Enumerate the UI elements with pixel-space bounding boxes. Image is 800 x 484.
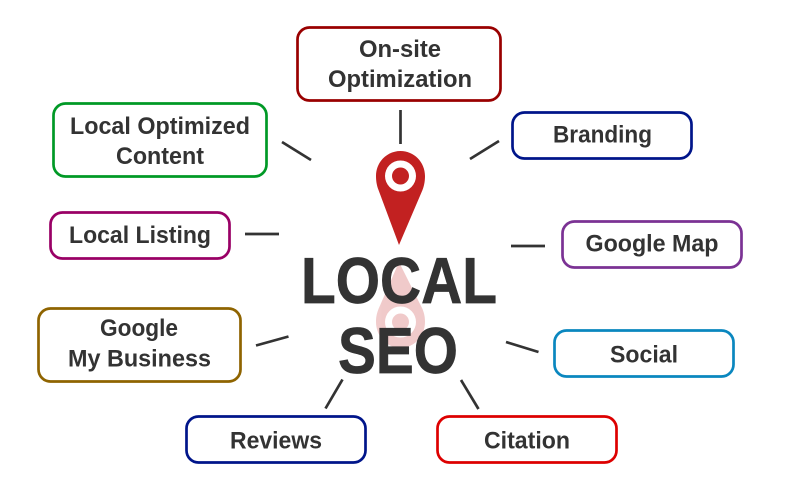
box: Social: Social	[610, 342, 678, 369]
reflected pin	[376, 262, 425, 348]
box: On-site Optimization: Optimization	[328, 66, 472, 93]
box: Social	[554, 330, 734, 376]
box: Reviews: Reviews	[230, 428, 322, 454]
box: Local Listing: Local Listing	[69, 222, 211, 249]
box: Google Map: Google Map	[586, 231, 718, 258]
box: Reviews	[186, 416, 366, 462]
connector lines	[245, 110, 545, 409]
box: Google Map	[562, 222, 742, 268]
map pin icon	[376, 151, 425, 245]
box: Local Listing	[50, 212, 230, 258]
box: Local Optimized Content: Content	[116, 143, 204, 170]
heading: Local SEO	[301, 244, 497, 387]
heading: Local SEO: SEO	[338, 314, 458, 387]
box: Google My Business: Google	[100, 315, 178, 342]
box: Local Optimized Content: Local Optimized	[70, 113, 250, 140]
box: On-site Optimization	[298, 28, 500, 100]
box: Citation: Citation	[484, 428, 570, 454]
box: Google My Business: My Business	[68, 346, 211, 372]
box: Branding: Branding	[553, 122, 652, 149]
box: On-site Optimization: On-site	[359, 36, 441, 63]
box: Local Optimized Content	[54, 104, 266, 176]
box: Branding	[512, 112, 692, 158]
box: Google My Business	[38, 308, 240, 382]
heading: Local SEO: LOCAL	[301, 244, 497, 317]
box: Citation	[438, 416, 616, 462]
